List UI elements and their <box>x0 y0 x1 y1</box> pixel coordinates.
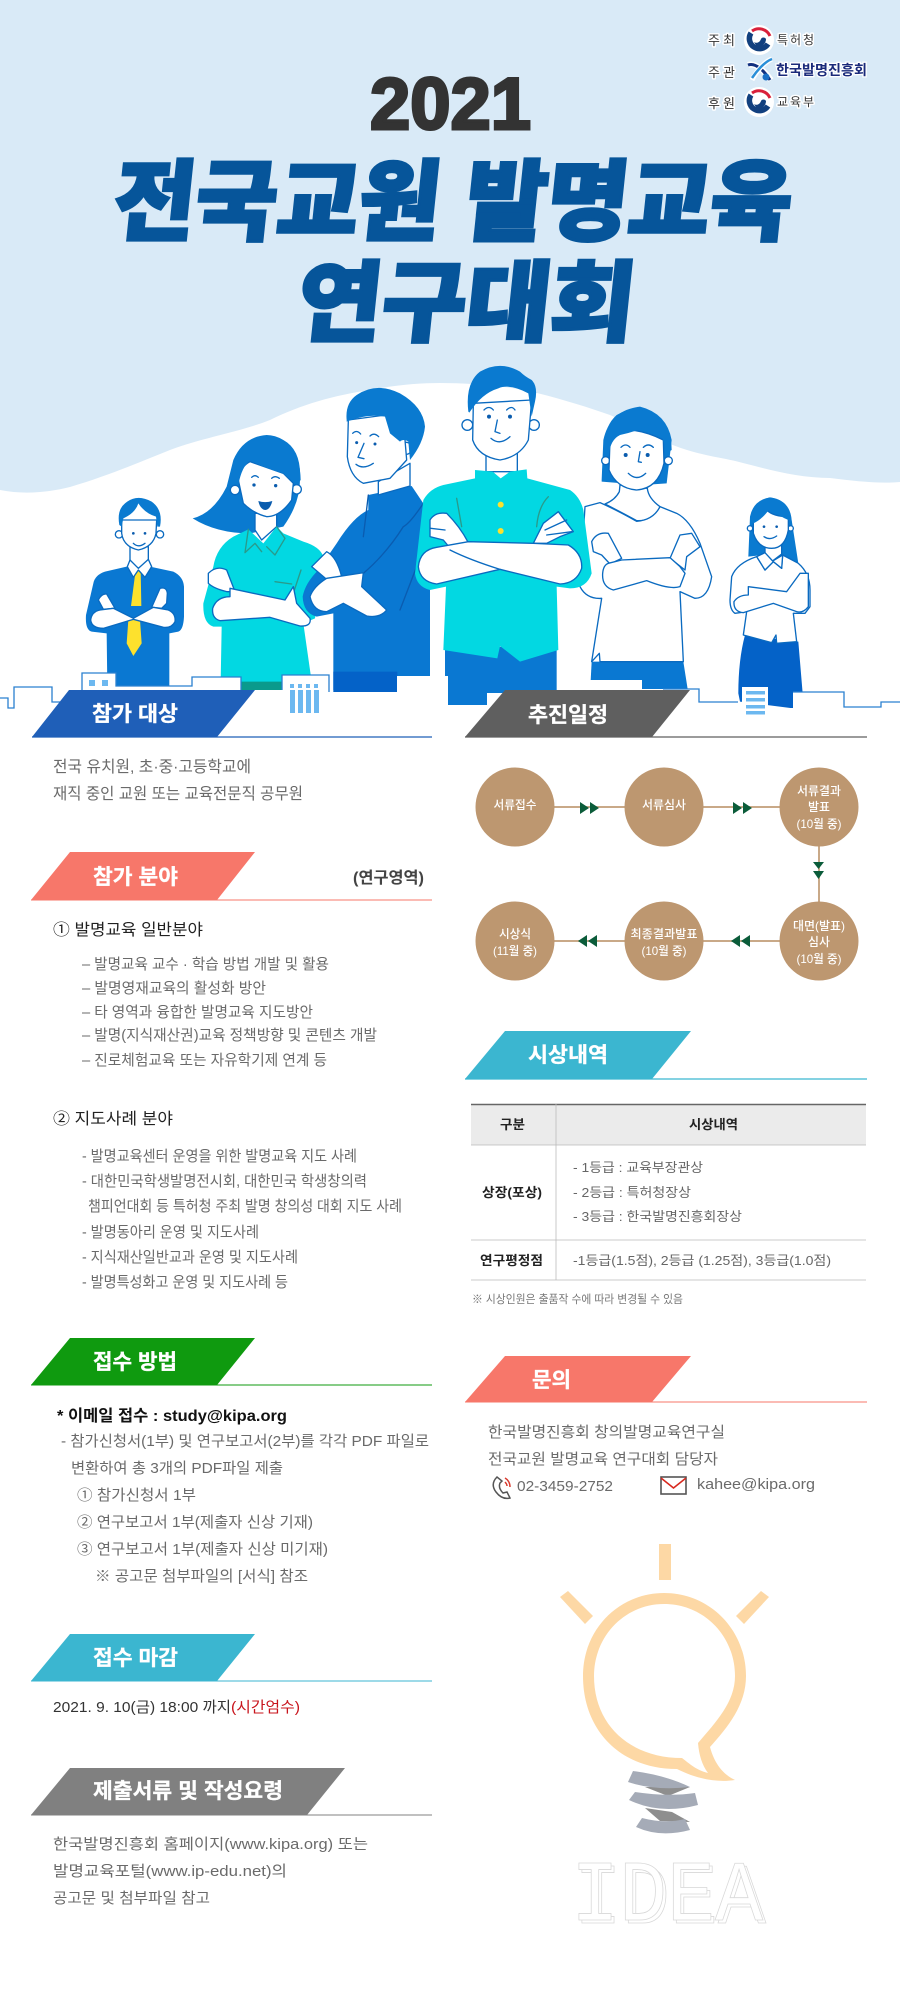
text: contact details: kahee@kipa.org <box>697 1476 815 1493</box>
organizer logos: 후원 <box>708 96 735 111</box>
heading: 문의 <box>465 1356 867 1402</box>
text: method details: ※ 공고문 첨부파일의 [서식] 참조 <box>95 1568 308 1585</box>
main title <box>109 153 797 353</box>
text: eligibility: 재직 중인 교원 또는 교육전문직 공무원 <box>53 785 303 803</box>
panel: contact <box>465 1356 867 1498</box>
text: IDEA outlined: IDEA <box>574 1851 766 1949</box>
text: deadline date: (시간엄수) <box>231 1699 300 1716</box>
table: - 3등급 : 한국발명진흥회장상 <box>573 1209 742 1224</box>
year title: 2021 <box>370 64 531 145</box>
icon: speech bubble bulb <box>583 1593 746 1781</box>
text: deadline date <box>53 1699 300 1716</box>
circle labels: (10월 중) <box>796 952 842 966</box>
text: field two: - 대한민국학생발명전시회, 대한민국 학생창의력 <box>82 1173 367 1190</box>
icon: KIPA logo <box>748 59 772 80</box>
text: field one: – 발명교육 교수 · 학습 방법 개발 및 활용 <box>82 956 329 973</box>
icon: rays <box>560 1544 769 1624</box>
person: small woman <box>730 497 810 708</box>
text: IDEA outlined: IDEA <box>571 1848 763 1946</box>
panel: awards <box>465 1031 867 1306</box>
text: document notes: 발명교육포털(www.ip-edu.net)의 <box>53 1863 287 1880</box>
text: method details: - 참가신청서(1부) 및 연구보고서(2부)를 각각 PDF 파일로 <box>61 1433 429 1450</box>
text: field two <box>53 1110 402 1291</box>
organizer logos <box>708 25 867 117</box>
organizer logos: 교육부 <box>777 95 814 109</box>
table: 연구평정점 <box>480 1253 543 1268</box>
circle labels: (10월 중) <box>642 944 686 958</box>
heading: 제출서류 및 작성요령: 제출서류 및 작성요령 <box>93 1780 283 1803</box>
text: deadline date: 2021. 9. 10(금) 18:00 까지 <box>53 1699 231 1716</box>
person: man with yellow tie <box>86 498 184 687</box>
icon: mail <box>661 1477 686 1494</box>
circle labels: 최종결과발표 <box>630 927 698 941</box>
text: contact details: 전국교원 발명교육 연구대회 담당자 <box>488 1451 718 1468</box>
heading: 접수 방법 <box>31 1338 432 1385</box>
text: document notes: 한국발명진흥회 홈페이지(www.kipa.org) 또는 <box>53 1835 368 1853</box>
heading: 참가 대상 <box>32 690 432 737</box>
flow chart <box>476 768 858 980</box>
circle labels: 대면(발표) <box>793 919 845 933</box>
text: method details <box>57 1407 429 1585</box>
person: man in blue shirt <box>303 388 430 693</box>
main title: 전국교원 발명교육 <box>109 153 797 252</box>
heading: 참가 대상: 참가 대상 <box>92 703 178 726</box>
icon: government emblem top <box>744 25 774 55</box>
organizer logos: 한국발명진흥회 <box>776 62 867 78</box>
circle labels <box>493 784 845 966</box>
circle labels: (11월 중) <box>493 944 537 958</box>
organizer logos: 주관 <box>708 65 735 80</box>
label: research area: (연구영역) <box>353 869 424 887</box>
circle labels: 시상식 <box>499 927 531 941</box>
heading: 접수 마감 <box>31 1634 432 1681</box>
panel: participants <box>32 690 432 803</box>
panel: fields <box>31 852 432 1291</box>
text: contact details: 한국발명진흥회 창의발명교육연구실 <box>488 1423 725 1441</box>
circle labels: 서류접수 <box>494 798 536 812</box>
panel: documents <box>31 1768 432 1907</box>
text: field two: ② 지도사례 분야 <box>53 1110 173 1128</box>
text: method details: ① 참가신청서 1부 <box>77 1487 196 1504</box>
person: woman in white shirt <box>580 407 712 693</box>
illustration: right group of teachers <box>415 366 810 708</box>
text: field two: 챔피언대회 등 특허청 주최 발명 창의성 대회 지도 사례 <box>88 1198 402 1215</box>
table: -1등급(1.5점), 2등급 (1.25점), 3등급(1.0점) <box>573 1253 831 1268</box>
heading: 참가 분야 <box>31 852 432 900</box>
circle labels: (10월 중) <box>796 817 842 831</box>
table <box>471 1104 866 1280</box>
heading: 추진일정: 추진일정 <box>528 704 608 727</box>
text: eligibility: 전국 유치원, 초·중·고등학교에 <box>53 758 251 776</box>
illustration: left group of teachers <box>86 388 430 693</box>
text: field two: - 발명특성화고 운영 및 지도사례 등 <box>82 1274 288 1291</box>
text: field one: – 진로체험교육 또는 자유학기제 연계 등 <box>82 1052 327 1069</box>
text: method details: ③ 연구보고서 1부(제출자 신상 미기재) <box>77 1541 328 1558</box>
icon: government emblem bottom <box>744 87 774 117</box>
illustration: idea light bulb <box>560 1544 769 1949</box>
heading: 제출서류 및 작성요령 <box>31 1768 432 1815</box>
text: contact details: 02-3459-2752 <box>517 1478 613 1495</box>
text: field one: – 타 영역과 융합한 발명교육 지도방안 <box>82 1004 313 1021</box>
heading: 시상내역 <box>465 1031 867 1079</box>
skyline <box>0 673 900 745</box>
organizer logos: 주최 <box>708 33 735 48</box>
main title: 연구대회 <box>293 254 640 353</box>
hero background wave <box>0 0 900 493</box>
text: field one: ① 발명교육 일반분야 <box>53 921 203 939</box>
text: document notes: 공고문 및 첨부파일 참고 <box>53 1890 210 1907</box>
panel: submission method <box>31 1338 432 1585</box>
text: document notes <box>53 1835 368 1907</box>
text: field two: - 발명동아리 운영 및 지도사례 <box>82 1224 259 1241</box>
table: - 2등급 : 특허청장상 <box>573 1185 691 1200</box>
icon: phone <box>493 1477 510 1498</box>
icon: bulb base <box>628 1771 698 1833</box>
person: center man in teal shirt <box>415 366 592 705</box>
circle labels: 서류결과 <box>797 784 841 798</box>
panel: schedule <box>465 690 867 980</box>
text: eligibility <box>53 758 303 803</box>
heading: 시상내역: 시상내역 <box>528 1044 608 1067</box>
table: 상장(포상) <box>482 1185 542 1200</box>
text: field one: – 발명(지식재산권)교육 정책방향 및 콘텐츠 개발 <box>82 1027 377 1044</box>
text: field two: - 발명교육센터 운영을 위한 발명교육 지도 사례 <box>82 1148 357 1165</box>
text: method details: ② 연구보고서 1부(제출자 신상 기재) <box>77 1514 313 1531</box>
heading: 접수 마감: 접수 마감 <box>93 1647 178 1670</box>
circle labels: 발표 <box>808 800 830 814</box>
arrows <box>578 802 824 947</box>
organizer logos: 특허청 <box>777 33 814 47</box>
circle labels: 심사 <box>808 935 830 949</box>
note: ※ 시상인원은 출품작 수에 따라 변경될 수 있음 <box>472 1292 683 1306</box>
text: contact details <box>488 1423 815 1495</box>
circle labels: 서류심사 <box>642 798 686 812</box>
person: woman in teal shirt <box>193 435 323 693</box>
heading: 문의: 문의 <box>532 1369 571 1392</box>
text: field one: – 발명영재교육의 활성화 방안 <box>82 980 266 997</box>
table: 구분 <box>500 1117 525 1132</box>
heading: 참가 분야: 참가 분야 <box>93 866 178 889</box>
heading: 접수 방법: 접수 방법 <box>93 1351 177 1374</box>
table: 시상내역 <box>689 1117 738 1132</box>
heading: 추진일정 <box>465 690 867 737</box>
text: method details: * 이메일 접수 : study@kipa.org <box>57 1407 287 1425</box>
text: field one <box>53 921 377 1069</box>
text: method details: 변환하여 총 3개의 PDF파일 제출 <box>71 1460 283 1477</box>
panel: deadline <box>31 1634 432 1716</box>
text: field two: - 지식재산일반교과 운영 및 지도사례 <box>82 1249 298 1266</box>
table: - 1등급 : 교육부장관상 <box>573 1160 703 1175</box>
